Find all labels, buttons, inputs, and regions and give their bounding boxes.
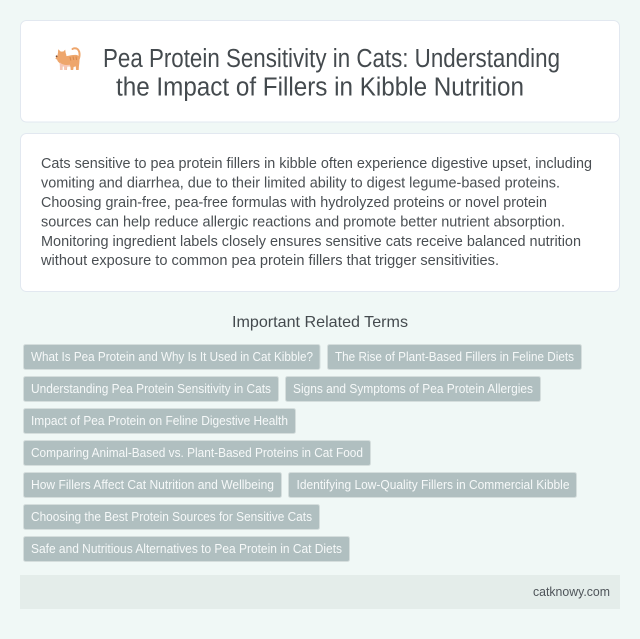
icon: cat [55,48,80,70]
title: the Impact of Fillers in Kibble Nutrition [116,74,524,102]
title: Pea Protein Sensitivity in Cats: Understanding [103,45,560,73]
tag [288,472,576,498]
panel: title card [20,20,620,122]
tag [24,344,320,370]
tag list [24,344,582,562]
tag: The Rise of Plant-Based Fillers in Feline Diets [335,349,574,364]
tag [24,472,282,498]
footer [20,575,620,609]
text block: summary: Choosing grain-free, pea-free formulas with hydrolyzed proteins or novel protein [41,194,547,211]
text block: summary: vomiting and diarrhea, due to their limited ability to digest legume-based proteins. [41,174,560,192]
tag: Signs and Symptoms of Pea Protein Allergies [293,381,533,396]
panel: summary text [20,134,620,292]
tag: Impact of Pea Protein on Feline Digestive Health [31,413,288,428]
tag: How Fillers Affect Cat Nutrition and Wellbeing [31,477,274,492]
footer source: catknowy.com [533,584,610,599]
tag [286,376,540,402]
tag [24,408,296,434]
text block: summary: Monitoring ingredient labels closely ensures sensitive cats receive balanced nutrition [41,233,581,250]
tag [24,504,320,530]
text block: summary: Cats sensitive to pea protein fillers in kibble often experience digestive upset, including [41,155,592,172]
tag [328,344,582,370]
tag [24,440,370,466]
tag: Safe and Nutritious Alternatives to Pea Protein in Cat Diets [31,541,342,556]
tag [24,536,350,562]
title [103,45,560,102]
tag: Identifying Low-Quality Fillers in Commercial Kibble [296,477,570,492]
tag: Understanding Pea Protein Sensitivity in Cats [31,381,271,396]
text block: summary: without exposure to common pea protein fillers that trigger sensitivities. [40,252,499,269]
tag: Comparing Animal-Based vs. Plant-Based Proteins in Cat Food [31,445,363,460]
tag [24,376,278,402]
tag: Choosing the Best Protein Sources for Sensitive Cats [31,509,312,524]
tag: What Is Pea Protein and Why Is It Used in Cat Kibble? [31,349,313,364]
text block: summary: sources can help reduce allergic reactions and promote better nutrient absorption. [41,214,565,230]
text block: summary [40,155,592,269]
heading: related terms: Important Related Terms [232,314,408,331]
